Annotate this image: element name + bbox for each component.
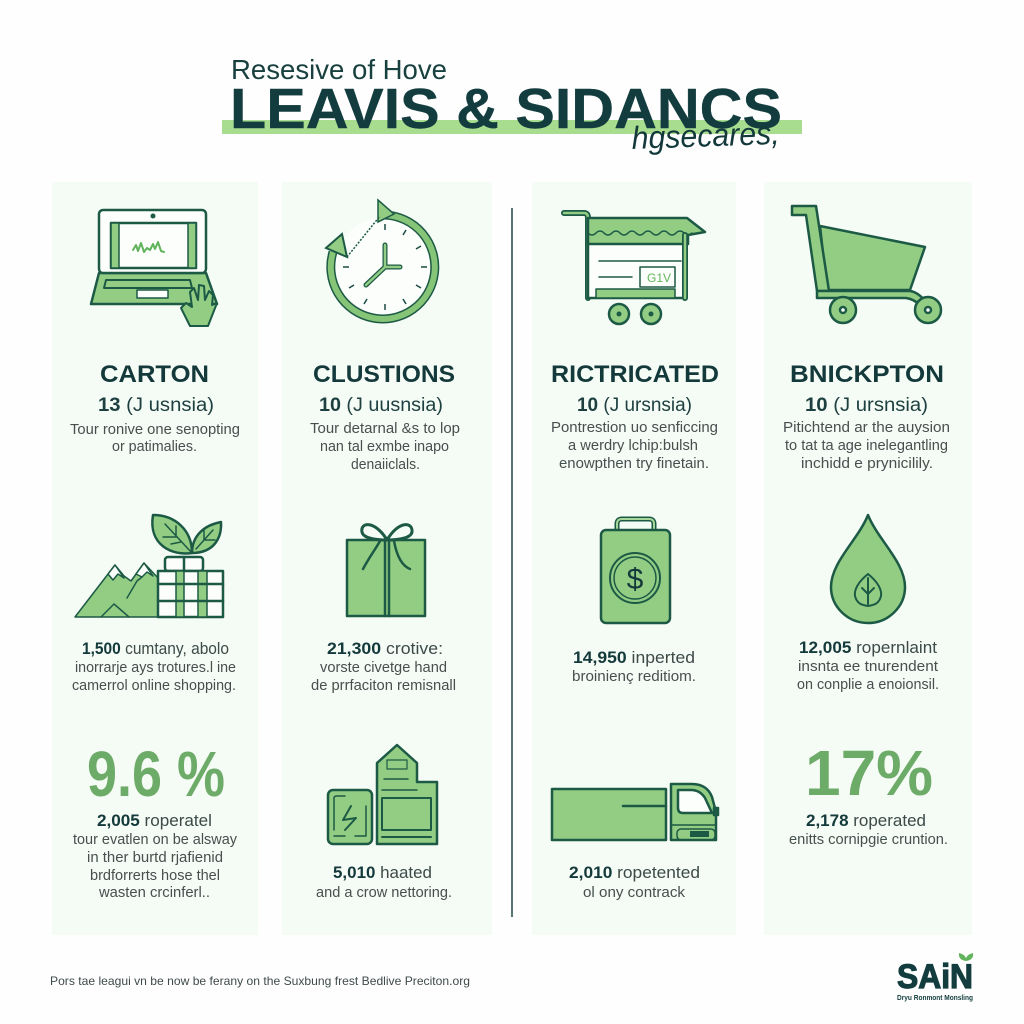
row 3 text column 1: brdforrerts hose thel (90, 868, 220, 884)
title block (222, 54, 802, 156)
row 2 text column 1 (72, 639, 236, 694)
stat: percentage column 1: 9.6 % (87, 738, 225, 810)
heading group column 2: Tour detarnal &s to lop (310, 421, 460, 437)
icon: shopping cart (792, 206, 941, 323)
heading group column 3: 10 (J ursnsia) (577, 395, 692, 416)
icon: gift box (347, 525, 425, 616)
icon: shopping bag with dollar coin: $ (627, 563, 644, 596)
panel: column 3 background (532, 182, 736, 935)
panel: column 4 background (764, 182, 972, 935)
heading group column 4: to tat ta age inelegantling (785, 438, 948, 454)
heading group column 3 (551, 361, 719, 472)
heading group column 2: denaiiclals. (351, 457, 420, 473)
icon: delivery truck (552, 784, 718, 840)
heading group column 4: BNICKPTON (790, 361, 944, 388)
stat: percentage column 4: 17% (805, 737, 933, 809)
row 2 text column 2: de prrfaciton remisnall (311, 678, 456, 694)
row 2 text column 4: on conplie a enoionsil. (797, 677, 939, 693)
heading group column 3: Pontrestion uo senficcing (551, 420, 718, 436)
heading group column 3: enowpthen try finetain. (559, 456, 709, 472)
row 2 text column 1: camerrol online shopping. (72, 678, 236, 694)
row 2 text column 4 (797, 638, 939, 693)
heading group column 1: Tour ronive one senopting (70, 422, 240, 438)
footer note: Pors tae leagui vn be now be ferany on the Suxbung frest Bedlive Preciton.org (50, 974, 470, 988)
row 3 text column 2 (316, 863, 452, 901)
logo: SAiN (897, 958, 973, 996)
heading group column 2 (310, 361, 460, 473)
overline: Resesive of Hove (231, 54, 447, 85)
row 3 text column 2: and a crow nettoring. (316, 885, 452, 901)
icon: shopping bag with dollar coin (601, 519, 670, 623)
row 3 text column 1 (73, 811, 238, 901)
logo: Dryu Ronmont Monsling (897, 995, 973, 1002)
icon: tablet and document (328, 745, 437, 844)
heading group column 1 (70, 361, 240, 455)
heading group column 2: nan tal exmbe inapo (320, 439, 449, 455)
row 2 text column 4: insnta ee tnurendent (798, 659, 938, 675)
heading group column 1: or patimalies. (112, 439, 197, 455)
heading group column 1: 13 (J usnsia) (98, 395, 214, 416)
heading group column 1: CARTON (100, 361, 209, 388)
icon: mountains, gift boxes and leaves (75, 515, 223, 617)
heading group column 4: inchidd e prynicilily. (801, 456, 933, 472)
icon: laptop with hand (91, 210, 217, 326)
row 3 text column 3: ol ony contrack (583, 885, 686, 901)
heading group column 2: CLUSTIONS (313, 361, 455, 388)
row 2 text column 4: 12,005 ropernlaint (799, 638, 937, 657)
main title: LEAVIS & SIDANCS (230, 77, 782, 141)
row 3 text column 3: 2,010 ropetented (569, 863, 700, 882)
row 2 text column 2: 21,300 crotive: (327, 639, 443, 658)
title highlight bar (222, 120, 802, 134)
panel: column 2 background (282, 182, 492, 935)
row 3 text column 4 (789, 811, 948, 848)
row 2 text column 2 (311, 639, 456, 694)
handwritten subtitle: hgsecares, (631, 115, 780, 156)
heading group column 4: 10 (J ursnsia) (805, 395, 928, 416)
icon: market stall cart: G1V (647, 271, 671, 285)
heading group column 4 (783, 361, 950, 472)
row 2 text column 1: inorrarje ays trotures.l ine (75, 660, 236, 676)
heading group column 3: a werdry lchip:bulsh (568, 438, 698, 454)
heading group column 3: RICTRICATED (551, 361, 719, 388)
row 3 text column 1: wasten crcinferl.. (98, 885, 210, 901)
row 3 text column 1: 2,005 roperatel (97, 811, 212, 830)
heading group column 4: Pitichtend ar the auysion (783, 420, 950, 436)
row 2 text column 2: vorste civetge hand (320, 660, 447, 676)
row 2 text column 3: broinienç reditiom. (572, 669, 696, 685)
row 2 text column 3 (572, 648, 696, 685)
row 3 text column 3 (569, 863, 700, 901)
row 2 text column 3: 14,950 inperted (573, 648, 695, 667)
row 3 text column 2: 5,010 haated (333, 863, 432, 882)
row 3 text column 1: tour evatlen on be alsway (73, 832, 238, 848)
icon: water drop with leaf (831, 515, 905, 623)
row 3 text column 4: enitts cornipgie cruntion. (789, 832, 948, 848)
row 3 text column 4: 2,178 roperated (806, 811, 926, 830)
icon: market stall cart (564, 213, 705, 324)
row 2 text column 1: 1,500 cumtany, abolo (82, 639, 229, 658)
row 3 text column 1: in ther burtd rjafienid (87, 850, 223, 866)
heading group column 2: 10 (J uusnsia) (319, 395, 443, 416)
icon: clock with arrow (326, 200, 435, 319)
panel: column 1 background (52, 182, 258, 935)
